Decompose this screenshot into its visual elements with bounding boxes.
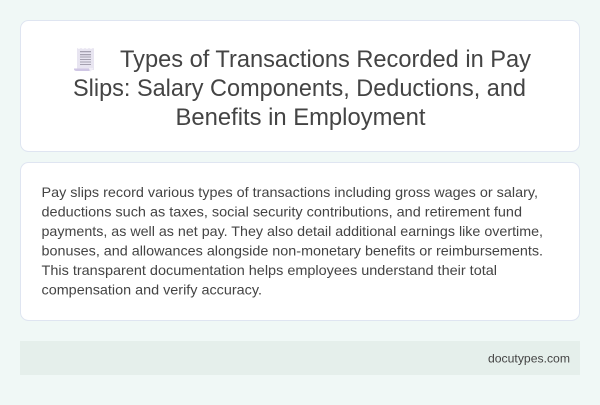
footer bar [20, 341, 580, 375]
text block: description: deductions such as taxes, social security contributions, and retirement fund [42, 204, 522, 220]
text block: description [42, 184, 543, 298]
text block: description: compensation and verify accuracy. [42, 282, 262, 298]
footer source text: docutypes.com [488, 352, 570, 366]
panel: title card [20, 20, 580, 152]
text block: description: Pay slips record various types of transactions including gross wages or salary, [42, 184, 538, 200]
text block: description: bonuses, and allowances alongside non-monetary benefits or reimbursements. [42, 242, 543, 258]
heading: Slips: Salary Components, Deductions, and [73, 75, 526, 102]
heading [73, 46, 531, 131]
icon: pay slip receipt [74, 48, 94, 72]
heading: Types of Transactions Recorded in Pay [120, 46, 531, 73]
text block: description: payments, as well as net pay. They also detail additional earnings like overtime, [42, 223, 543, 239]
heading: Benefits in Employment [176, 104, 426, 131]
panel: description card [20, 162, 580, 320]
text block: description: This transparent documentation helps employees understand their total [42, 262, 497, 278]
